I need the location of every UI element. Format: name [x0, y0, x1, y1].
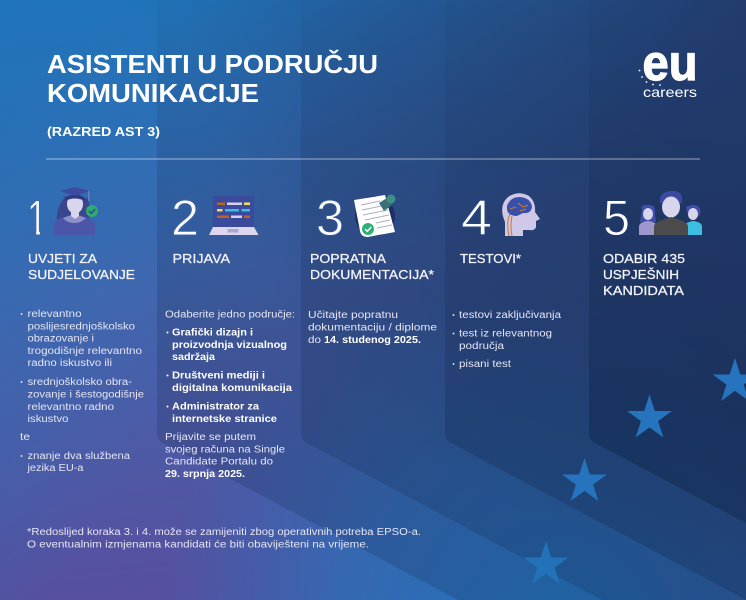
upload text: do: [308, 335, 322, 346]
number 1: 1: [27, 190, 47, 246]
application text: Prijavite se putem: [165, 432, 256, 443]
application text: internetske stranice: [172, 414, 277, 425]
requirements list: relevantno: [28, 309, 82, 320]
heading: DOKUMENTACIJA*: [310, 268, 434, 282]
application text: svojeg računa na Single: [165, 444, 285, 455]
icon: graduate: [54, 187, 98, 235]
requirements list: relevantno radno: [28, 402, 114, 413]
icon: head with brain: [502, 193, 540, 236]
title: KOMUNIKACIJE: [47, 80, 259, 108]
requirements list: znanje dva službena: [28, 451, 130, 462]
step column panels: [157, 0, 746, 600]
subtitle: (RAZRED AST 3): [47, 124, 160, 139]
upload text: Učitajte popratnu: [308, 310, 398, 321]
footnote: [27, 527, 421, 550]
application text: [165, 310, 295, 480]
heading: [310, 252, 434, 282]
number 5: 5: [603, 190, 630, 246]
decorative stars: [524, 358, 746, 584]
number 2: 2: [171, 190, 199, 246]
heading: SUDJELOVANJE: [28, 268, 135, 282]
requirements list: obrazovanje i: [28, 334, 94, 345]
requirements list: srednjoškolsko obra-: [28, 377, 132, 388]
upload text: 14. studenog 2025.: [324, 335, 421, 346]
requirements list: poslijesrednjoškolsko: [28, 322, 135, 332]
upload text: [308, 310, 438, 346]
heading: KANDIDATA: [603, 284, 685, 298]
step 1: [20, 187, 144, 474]
requirements list: te: [20, 432, 31, 443]
tests list: testovi zaključivanja: [459, 310, 562, 321]
heading: UVJETI ZA: [28, 252, 98, 266]
application text: proizvodnja vizualnog: [172, 340, 287, 351]
step 5: [603, 190, 702, 298]
tests list: pisani test: [459, 359, 511, 370]
application text: Društveni mediji i: [172, 370, 265, 382]
footnote: O eventualnim izmjenama kandidati će biti obaviješteni na vrijeme.: [27, 540, 369, 550]
heading: USPJEŠNIH: [603, 267, 679, 282]
requirements list: iskustvo: [28, 414, 69, 425]
application text: Grafički dizajn i: [172, 328, 253, 338]
heading: PRIJAVA: [172, 252, 231, 266]
step 3: [308, 190, 438, 346]
tests list: test iz relevantnog: [459, 328, 552, 340]
application text: Candidate Portalu do: [165, 457, 273, 468]
title: [47, 49, 378, 108]
icon: laptop: [209, 196, 258, 235]
application text: sadržaja: [172, 352, 215, 363]
application text: 29. srpnja 2025.: [165, 469, 245, 480]
number 4: 4: [461, 190, 492, 246]
footnote: *Redoslijed koraka 3. i 4. može se zamijeniti zbog operativnih potreba EPSO-a.: [27, 527, 421, 538]
requirements list: zovanje i šestogodišnje: [28, 390, 144, 400]
heading: [28, 252, 135, 282]
requirements list: [20, 309, 144, 474]
application text: Administrator za: [172, 402, 259, 412]
upload text: dokumentaciju / diplome: [308, 322, 438, 333]
tests list: [453, 310, 562, 370]
requirements list: jezika EU-a: [26, 463, 84, 474]
title: ASISTENTI U PODRUČJU: [47, 49, 378, 79]
requirements list: radno iskustvo ili: [28, 358, 112, 369]
step 4: [453, 190, 562, 370]
icon: document with stamp: [354, 194, 396, 237]
heading: ODABIR 435: [603, 252, 685, 266]
step 2: [165, 190, 295, 480]
heading: POPRATNA: [310, 252, 387, 266]
tests list: područja: [459, 341, 505, 352]
heading: [603, 252, 685, 298]
number 3: 3: [316, 190, 344, 246]
logo: EU careers: careers: [643, 84, 697, 100]
requirements list: trogodišnje relevantno: [28, 346, 143, 357]
heading: TESTOVI*: [460, 252, 521, 266]
logo: EU careers: eu: [642, 35, 698, 91]
application text: Odaberite jedno područje:: [165, 310, 295, 320]
application text: digitalna komunikacija: [172, 383, 292, 394]
divider: [46, 158, 700, 160]
icon: three people: [639, 191, 702, 235]
